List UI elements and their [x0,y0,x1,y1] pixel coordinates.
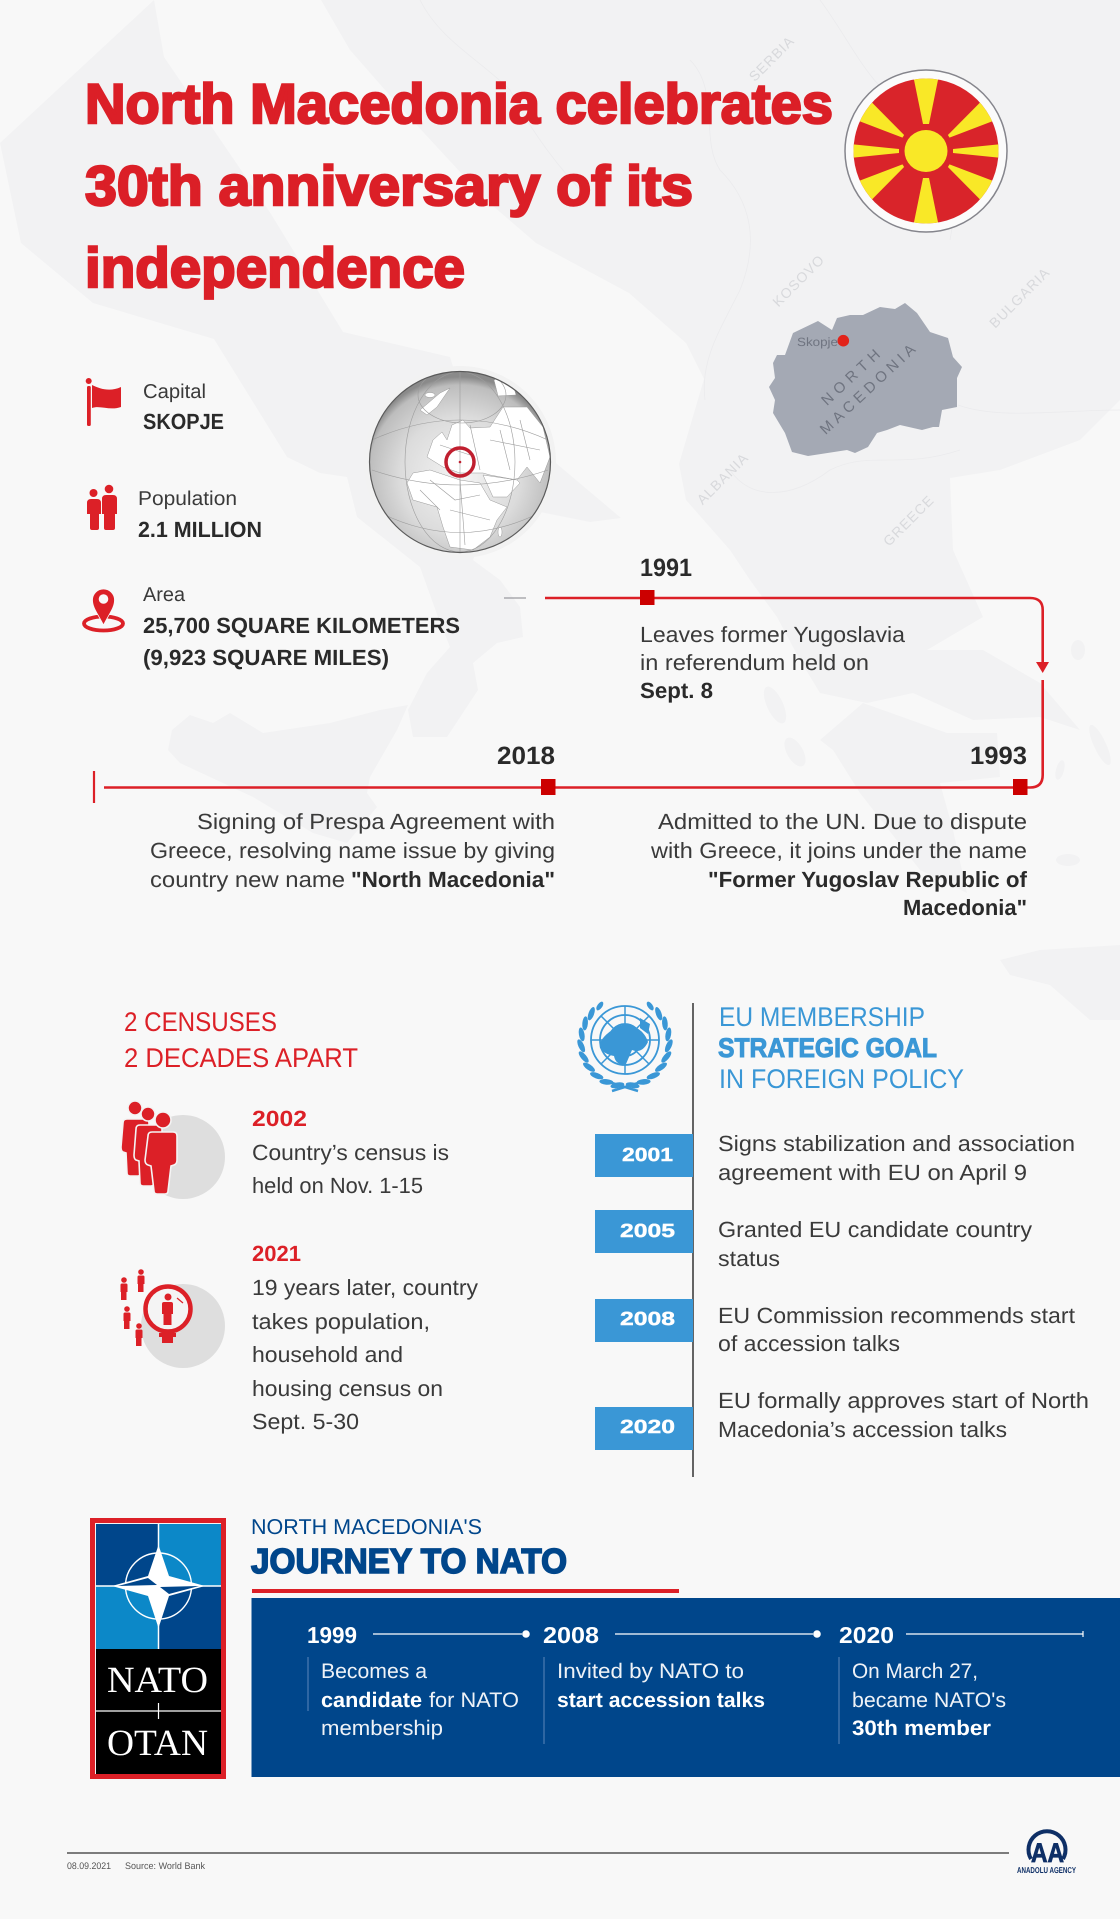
item: 2005: Granted EU candidate country [718,1217,1032,1242]
marker: 1993: Macedonia" [903,895,1027,920]
text: census 2002: Country’s census is [252,1140,449,1165]
item: 2008 [543,1622,765,1744]
marker: 1993: 1993 [970,742,1027,770]
icon: Anadolu Agency logo [1017,1831,1076,1875]
icon: UN emblem [576,1000,674,1091]
item: 2005 [595,1210,1032,1271]
panel: key facts [84,378,460,670]
map: North Macedonia: NORTH [818,346,884,409]
icon: map pin [84,589,123,630]
heading: EU membership [718,1002,964,1094]
item: 2001: Signs stabilization and association [718,1131,1075,1156]
item: 2008: Invited by NATO to [557,1660,744,1683]
item: 2020 [595,1388,1089,1450]
heading: journey to NATO [251,1515,679,1593]
item: 1999 [307,1622,519,1740]
heading: EU membership: EU MEMBERSHIP [719,1002,925,1032]
heading: journey to NATO: JOURNEY TO NATO [251,1542,567,1581]
text: census 2002: 2002 [252,1106,307,1131]
item: 2020: 2020 [620,1417,675,1438]
title: independence [85,236,465,299]
title [85,72,833,299]
panel: censuses [120,1007,478,1434]
marker: 1991 [640,554,906,703]
globe [364,366,556,558]
text: area: (9,923 SQUARE MILES) [143,645,389,670]
text: capital: SKOPJE [143,409,224,434]
marker: 2018: country new name [150,867,345,892]
icon: North Macedonia flag [845,70,1007,232]
text: census 2021: 2021 [252,1241,301,1266]
item: 2020: 30th member [852,1717,991,1740]
marker: 2018: Signing of Prespa Agreement with [197,809,555,834]
item: 1999: for NATO [429,1689,519,1712]
marker: 1991: Leaves former Yugoslavia [640,622,906,647]
marker: 1993: with Greece, it joins under the name [650,838,1027,863]
independence timeline [94,554,1049,920]
map: country labels: SERBIA [746,33,797,84]
item: 1999: membership [321,1717,443,1740]
icon: census 2021 [120,1269,225,1368]
item: 1999: Becomes a [321,1660,427,1683]
heading: EU membership: STRATEGIC GOAL [718,1033,937,1063]
icon: flag [86,378,121,426]
item: 2020: became NATO's [852,1689,1006,1712]
text: area [143,584,460,670]
text: census 2021: takes population, [252,1309,430,1334]
item: 2008: of accession talks [718,1331,900,1356]
heading: censuses [124,1007,358,1073]
item: 2008: 2008 [543,1622,599,1648]
panel: EU membership [576,1000,1089,1477]
item: 2001: 2001 [622,1145,674,1166]
icon: NATO logo: NATO [107,1660,208,1701]
panel: NATO timeline [252,1598,1120,1777]
text: census 2021: Sept. 5-30 [252,1409,359,1434]
arrow [1036,662,1049,673]
map: North Macedonia: Skopje [797,335,838,349]
map: country labels: ALBANIA [693,449,752,508]
marker: 1993 [650,742,1028,920]
item: 2008: 2008 [620,1309,675,1330]
item: 2008: EU Commission recommends start [718,1303,1075,1328]
marker: 1993: "Former Yugoslav Republic of [708,867,1028,892]
map: country labels: GREECE [880,492,937,549]
item: 2020: EU formally approves start of North [718,1388,1089,1413]
icon: Anadolu Agency logo: AA [1031,1838,1064,1868]
marker: 2018 [150,742,556,892]
item: 2008 [595,1299,1075,1356]
item: 2005: 2005 [620,1221,676,1242]
icon: NATO logo: OTAN [107,1723,208,1764]
footer: 08.09.2021 [67,1861,111,1872]
title: North Macedonia celebrates [85,72,833,135]
text: census 2021: housing census on [252,1376,443,1401]
item: 2001 [595,1131,1075,1185]
text: population [138,488,262,542]
marker: 2018: 2018 [497,742,555,770]
text: capital [143,381,224,434]
map: North Macedonia: MACEDONIA [817,341,919,438]
heading: censuses: 2 CENSUSES [124,1007,277,1037]
item: 2020: On March 27, [852,1660,978,1683]
marker: 1991: 1991 [640,554,692,582]
map: country labels [693,33,1053,549]
item: 2001: agreement with EU on April 9 [718,1160,1027,1185]
icon: NATO logo [92,1520,224,1776]
text: area: Area [143,584,186,606]
map: country labels: BULGARIA [986,264,1053,331]
text: population: 2.1 MILLION [138,517,262,542]
item: 2008: start accession talks [557,1689,765,1712]
text: population: Population [138,488,237,510]
marker: 2018: "North Macedonia" [351,867,555,892]
item: 2005: status [718,1246,780,1271]
marker: 1991: Sept. 8 [640,678,713,703]
text: capital: Capital [143,381,206,403]
text: area: 25,700 SQUARE KILOMETERS [143,613,460,638]
icon: population [87,485,117,530]
text: census 2002: held on Nov. 1-15 [252,1173,423,1198]
item: 2020 [839,1622,1006,1744]
divider [692,1003,694,1477]
title: 30th anniversary of its [85,154,693,217]
heading: censuses: 2 DECADES APART [124,1043,358,1073]
map: country labels: KOSOVO [769,251,828,310]
marker: 1993: Admitted to the UN. Due to dispute [658,809,1027,834]
marker: 2018: Greece, resolving name issue by giving [150,838,555,863]
heading: EU membership: IN FOREIGN POLICY [719,1064,964,1094]
item: 2020: Macedonia’s accession talks [718,1417,1007,1442]
item: 1999: 1999 [307,1622,357,1648]
marker: 1991: in referendum held on [640,650,869,675]
footer [67,1853,1009,1872]
icon: Anadolu Agency logo: ANADOLU AGENCY [1017,1865,1076,1875]
icon: census 2002 [121,1101,225,1199]
text: census 2021: household and [252,1342,403,1367]
map: North Macedonia [769,303,962,456]
text: census 2021: 19 years later, country [252,1275,478,1300]
item: 2020: 2020 [839,1622,894,1648]
timeline connector lines [373,1630,1083,1638]
text: census 2021 [252,1241,478,1434]
footer: Source: World Bank [125,1861,205,1872]
text: census 2002 [252,1106,449,1198]
item: 1999: candidate [321,1689,422,1712]
heading: journey to NATO: NORTH MACEDONIA'S [251,1515,482,1539]
